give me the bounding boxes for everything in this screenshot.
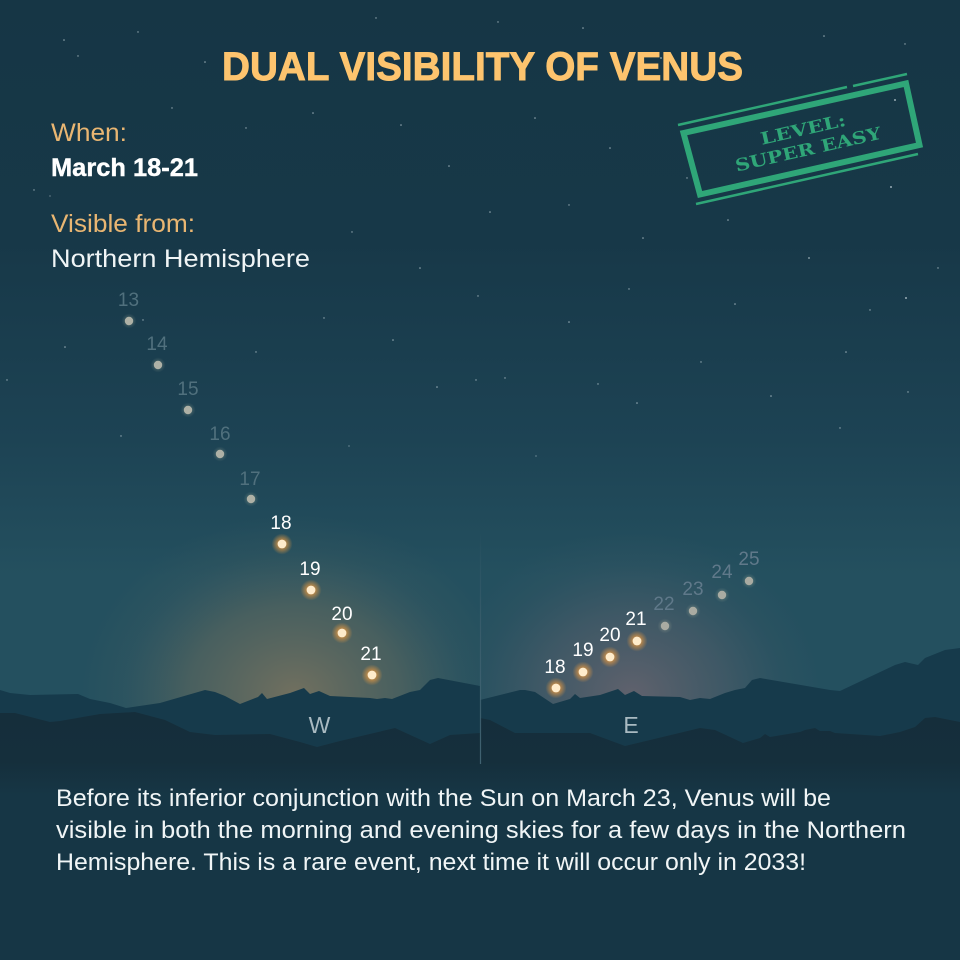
description paragraph: Hemisphere. This is a rare event, next time it will occur only in 2033! [56,849,806,876]
highlighted dates 18 to 21: 21 [625,609,647,630]
direction label: west: W [309,712,331,738]
lower background [0,795,960,960]
stamp text: SUPER EASY [733,124,884,176]
panel divider [480,530,482,764]
faded dates 13 to 17 [118,290,261,506]
horizon glow: west [126,552,464,708]
faded dates 22 to 25: 24 [711,562,733,583]
highlighted dates 18 to 21 [544,609,648,698]
text block: when: When: [51,119,127,147]
text block: when [51,119,198,182]
faded dates 13 to 17: 17 [239,469,261,490]
west path of Venus [118,290,382,686]
east path of Venus [544,549,760,698]
faded dates 22 to 25: 25 [738,549,760,570]
stamp: level super easy [678,74,920,204]
description paragraph: visible in both the morning and evening skies for a few days in the Northern [56,817,906,844]
text block: visible from [51,210,310,273]
highlighted dates 18 to 21: 19 [299,559,321,580]
mountains: west front ridge [0,712,480,800]
horizon glow: east [488,569,776,704]
highlighted dates 18 to 21: 20 [599,625,621,646]
title: DUAL VISIBILITY OF VENUS [222,45,743,89]
mountains: west back ridge [0,678,480,790]
highlighted dates 18 to 21: 21 [360,644,382,665]
text block: when: March 18-21 [51,154,198,182]
faded dates 13 to 17: 15 [177,379,199,400]
mountains: east back ridge [480,648,960,790]
text block: visible from: Northern Hemisphere [51,245,310,273]
faded dates 22 to 25: 23 [682,579,704,600]
text block: visible from: Visible from: [51,210,195,238]
highlighted dates 18 to 21: 20 [331,604,353,625]
mountains: east front ridge [480,717,960,800]
faded dates 22 to 25 [653,549,760,634]
faded dates 22 to 25: 22 [653,594,675,615]
description paragraph [56,785,906,876]
highlighted dates 18 to 21 [270,513,382,686]
highlighted dates 18 to 21: 18 [270,513,292,534]
highlighted dates 18 to 21: 19 [572,640,594,661]
direction label: east: E [623,712,639,738]
stars [6,17,939,457]
faded dates 13 to 17: 14 [146,334,168,355]
highlighted dates 18 to 21: 18 [544,657,566,678]
faded dates 13 to 17: 16 [209,424,231,445]
description paragraph: Before its inferior conjunction with the Sun on March 23, Venus will be [56,785,831,812]
stamp text: LEVEL: [759,111,848,150]
stamp text [729,104,884,176]
faded dates 13 to 17: 13 [118,290,139,311]
